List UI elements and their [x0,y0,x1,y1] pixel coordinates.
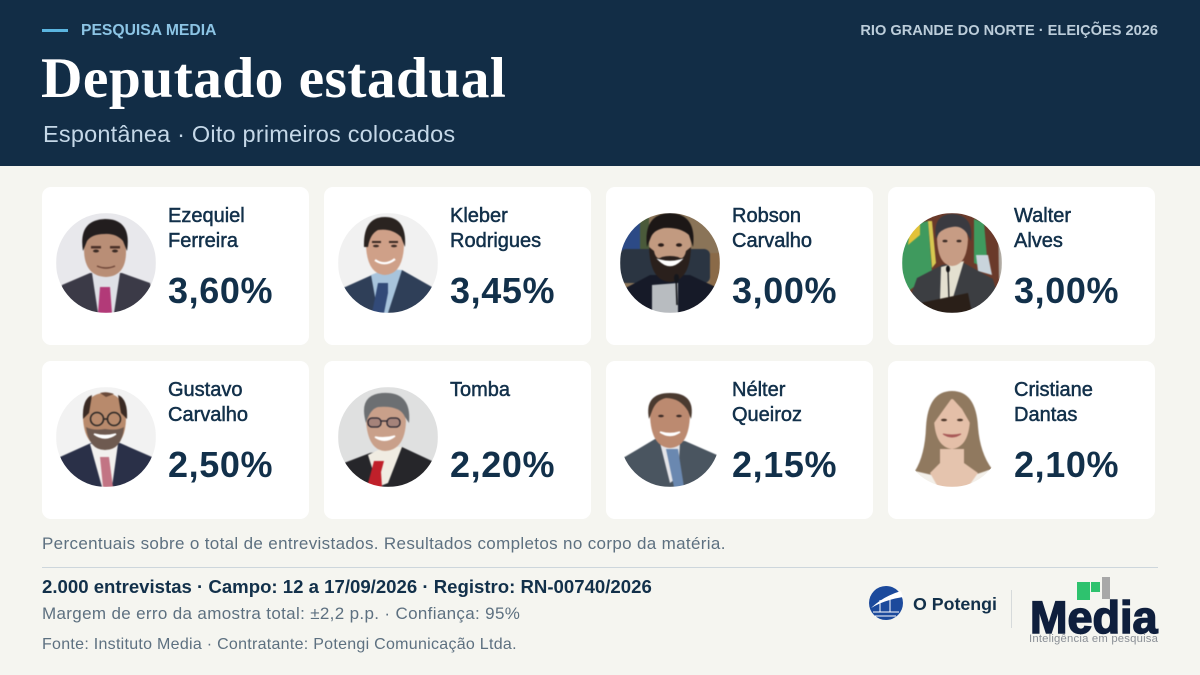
region and election label: RIO GRANDE DO NORTE · ELEIÇÕES 2026 [860,23,1158,39]
name [168,379,248,426]
portrait: Tomba [338,387,438,487]
percentage: 3,00% [1014,270,1119,311]
percentage: 3,45% [450,270,555,311]
name [1014,379,1093,426]
percentage: 2,20% [450,444,555,485]
name [732,205,812,252]
margin of error: Margem de erro da amostra total: ±2,2 p.p. · Confiança: 95% [42,604,520,623]
methodology line: 2.000 entrevistas · Campo: 12 a 17/09/2026 · Registro: RN-00740/2026 [42,576,652,597]
portrait: Walter Alves [902,213,1002,313]
tagline: Inteligência em pesquisa [1029,633,1158,645]
name: Robson [732,205,801,227]
portrait: Cristiane Dantas [914,390,992,487]
percentage: 2,15% [732,444,837,485]
name [1014,205,1071,252]
name: Dantas [1014,404,1077,426]
name: Tomba [450,379,510,401]
portrait: Gustavo Carvalho [56,387,156,487]
portrait: Robson Carvalho [620,213,720,313]
header band [0,0,1200,166]
icon: O Potengi bridge emblem [869,586,903,620]
percentage: 2,50% [168,444,273,485]
percentage: 3,60% [168,270,273,311]
eyebrow accent line [42,29,68,32]
name [450,205,541,252]
percentage: 3,00% [732,270,837,311]
percentage: 2,10% [1014,444,1119,485]
name [168,205,245,252]
name: Kleber [450,205,508,227]
card: Walter Alves [888,187,1155,345]
card: Tomba [324,361,591,519]
name: Walter [1014,205,1071,227]
card: Cristiane Dantas [888,361,1155,519]
name: Ezequiel [168,205,245,227]
name: Ferreira [168,230,238,252]
wordmark: O Potengi [913,594,997,614]
name: Carvalho [168,404,248,426]
name: Carvalho [732,230,812,252]
portrait: Nélter Queiroz [624,392,717,487]
note: Percentuais sobre o total de entrevistados. Resultados completos no corpo da matéria. [42,534,726,553]
name: Nélter [732,379,785,401]
logo: O Potengi [869,586,997,620]
card: Robson Carvalho [606,187,873,345]
source: Fonte: Instituto Media · Contratante: Potengi Comunicação Ltda. [42,636,517,653]
logo bars [1077,582,1090,600]
name: Gustavo [168,379,242,401]
name [732,379,802,426]
card: Nélter Queiroz [606,361,873,519]
eyebrow label: PESQUISA MEDIA [81,22,216,39]
logo: Media [1029,577,1159,645]
subtitle: Espontânea · Oito primeiros colocados [43,121,455,147]
title: Deputado estadual [41,47,506,110]
card: Gustavo Carvalho [42,361,309,519]
portrait: Kleber Rodrigues [338,213,438,313]
name: Rodrigues [450,230,541,252]
name: Queiroz [732,404,802,426]
portrait: Ezequiel Ferreira [56,213,156,313]
card: Kleber Rodrigues [324,187,591,345]
card: Ezequiel Ferreira [42,187,309,345]
name: Cristiane [1014,379,1093,401]
wordmark: Media [1030,592,1158,643]
name: Alves [1014,230,1063,252]
